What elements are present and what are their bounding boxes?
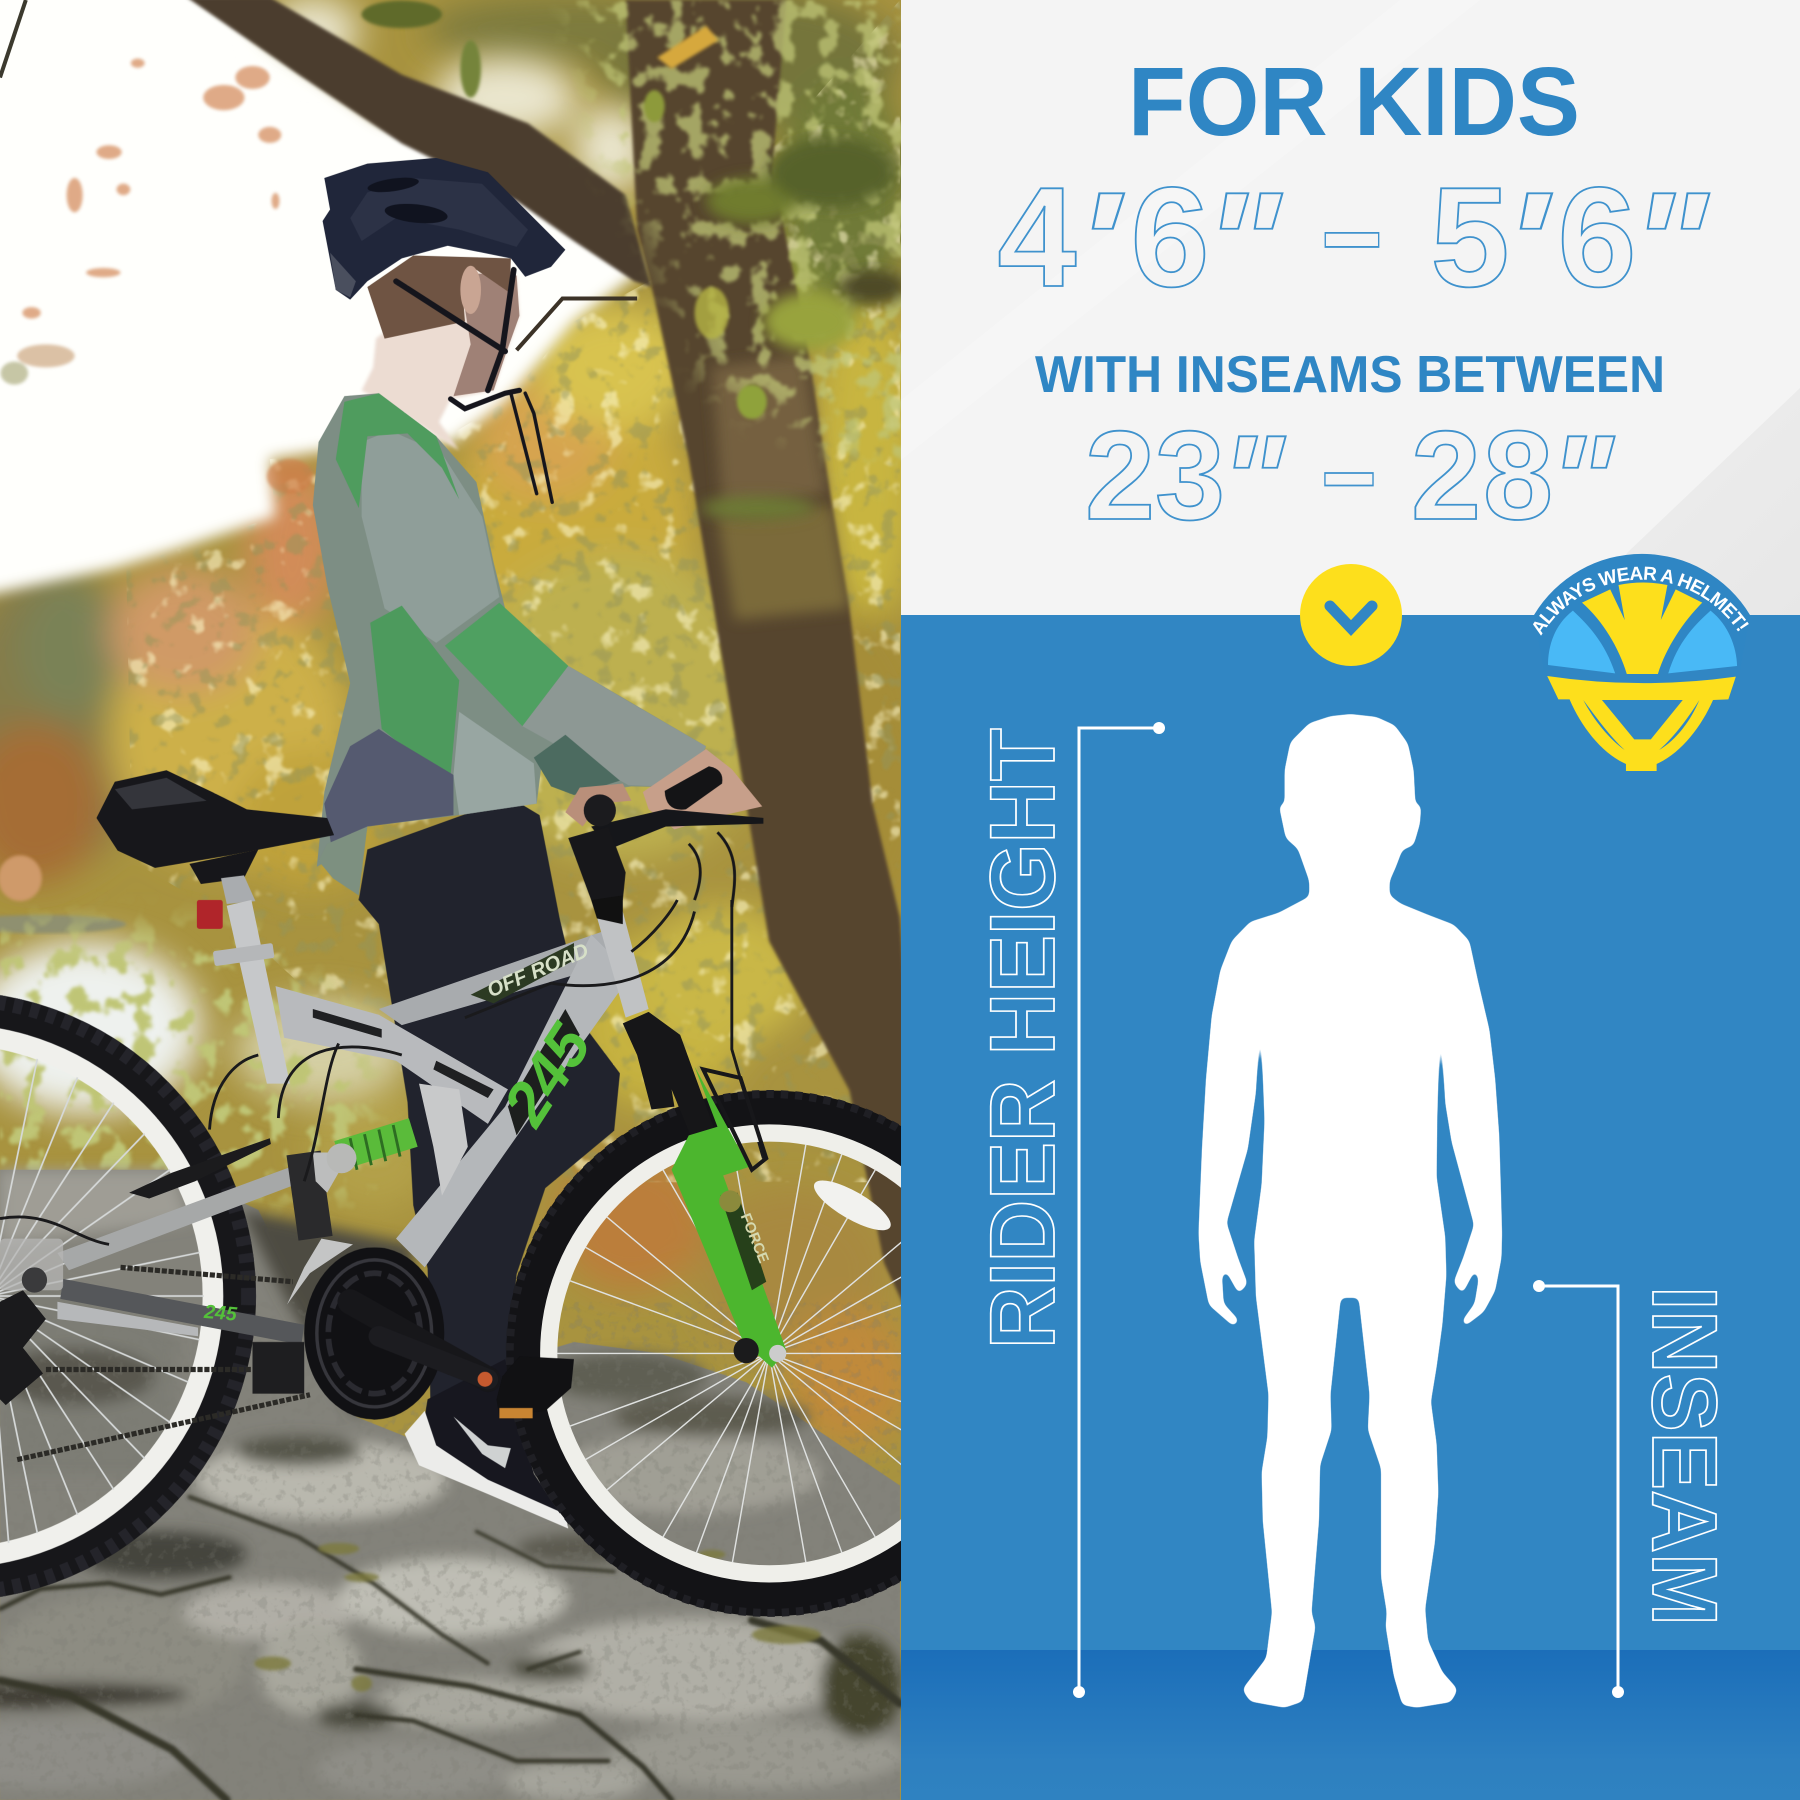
sneaker on rock: [405, 1359, 568, 1529]
helmet dome yellow panels: [1582, 582, 1702, 674]
trousers: [359, 798, 620, 1406]
panel: photo of boy with mountain bike: [0, 0, 901, 1800]
helmet: [323, 158, 565, 300]
inseam range: 3: [1155, 405, 1225, 546]
helmet badge: ALWAYS WEAR A HELMET!: [1533, 566, 1749, 636]
sky patches above branch: [267, 0, 649, 192]
subheading: WITH INSEAMS BETWEEN: [1035, 346, 1665, 404]
child silhouette: [1198, 714, 1502, 1708]
bike saddle and seat post: [96, 770, 334, 929]
rider height measure line: [1073, 722, 1165, 1698]
green spring: [339, 1132, 413, 1155]
front suspension fork: [623, 1012, 786, 1368]
rider height range: 5: [1431, 158, 1509, 317]
front bike wheel: [510, 1094, 1029, 1613]
second tube: [276, 986, 508, 1124]
rear brake and derailleur: [129, 1138, 271, 1198]
panel: size guide: [901, 0, 1800, 1800]
wheel reflector: [808, 1172, 897, 1239]
green frame text: 245: [490, 1012, 606, 1138]
rear stays: [57, 1164, 304, 1270]
bike frame: OFF ROAD: [484, 939, 592, 1002]
down tube: [396, 934, 631, 1267]
rider height range: ': [1503, 163, 1552, 321]
inseam range: ": [1549, 409, 1615, 550]
suspension bracket: [419, 1084, 468, 1196]
inseam measure line: [1533, 1280, 1624, 1698]
top tube: [379, 930, 615, 1025]
chainring, crank and pedal: [253, 1247, 574, 1419]
photo background: sky, autumn foliage and tree: [0, 0, 941, 1800]
blue background: [901, 615, 1800, 1800]
inseam label: INSEAM: [1633, 1286, 1735, 1626]
bike frame: 245: [202, 1301, 239, 1326]
helmet lower shell and straps: [1547, 676, 1736, 771]
bike frame: [0, 900, 763, 1460]
distant water and bright bokeh behind bike: [0, 941, 408, 1114]
rider height range: –: [1322, 150, 1382, 309]
upper leaves over the trunk: [564, 0, 901, 464]
boy in helmet and long-sleeved shirt: [313, 158, 706, 1406]
helmet straps: [396, 270, 552, 502]
light background: [901, 0, 1800, 616]
rider height range: [998, 150, 1710, 322]
front suspension fork: FORCE: [737, 1211, 772, 1266]
seat tube: [227, 900, 290, 1084]
helmet badge: [1533, 554, 1750, 771]
rider height range: ": [1630, 163, 1710, 322]
hands, grip, handlebar and stem: [565, 749, 763, 924]
inseam range: ": [1220, 409, 1286, 550]
rear bike wheel: [0, 999, 249, 1593]
inseam range: 2: [1411, 405, 1481, 546]
rider height range: 4: [998, 158, 1077, 317]
neck and face: [362, 270, 519, 451]
rider height label: RIDER HEIGHT: [972, 728, 1074, 1349]
inseam range: [1085, 399, 1615, 550]
shirt body: [313, 393, 706, 867]
cables: [0, 900, 763, 1244]
floor band: [901, 1650, 1800, 1800]
helmet dome light blue panels: [1548, 611, 1737, 673]
title: FOR KIDS: [1128, 47, 1580, 156]
tree trunk: [626, 0, 918, 1337]
inseam range: 8: [1483, 405, 1553, 546]
sky-side branches and sparse leaves: [1, 59, 313, 494]
sky: [0, 0, 643, 597]
large branch: [187, 0, 651, 287]
rider height range: ': [1075, 163, 1124, 321]
rider height range: ": [1203, 163, 1283, 322]
rocks in the foreground: [0, 1170, 907, 1800]
chain: [17, 1267, 310, 1460]
inseam range: –: [1322, 399, 1376, 540]
inseam range: 2: [1085, 405, 1155, 546]
yellow chevron badge: [1300, 564, 1402, 666]
rider height range: 6: [1558, 158, 1636, 317]
rider height range: 6: [1131, 158, 1209, 317]
